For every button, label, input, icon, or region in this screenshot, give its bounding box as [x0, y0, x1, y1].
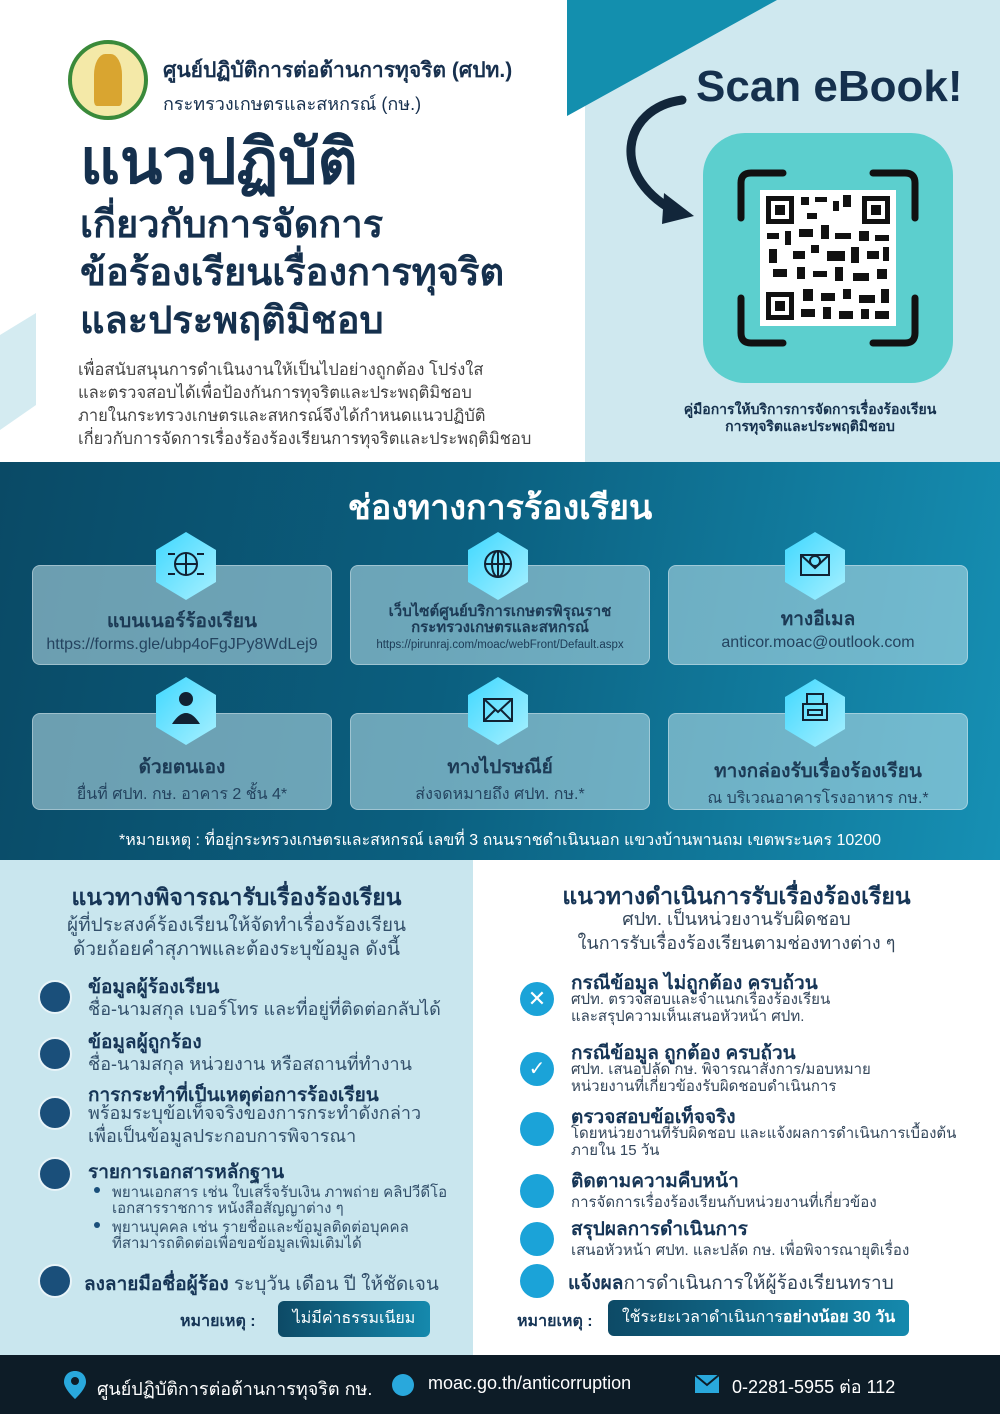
step: correct [520, 1042, 871, 1095]
main title: เกี่ยวกับการจัดการ [80, 204, 383, 246]
intro paragraph: เกี่ยวกับการจัดการเรื่องร้องร้องเรียนการทุจริตและประพฤติมิชอบ [78, 430, 531, 448]
intro paragraph [78, 358, 531, 448]
org name: ศูนย์ปฏิบัติการต่อต้านการทุจริต (ศปท.) [163, 59, 512, 82]
item: signature: ลงลายมือชื่อผู้ร้อง ระบุวัน เดือน ปี ให้ชัดเจน [84, 1274, 439, 1295]
note: 30 days: หมายเหตุ : [517, 1313, 593, 1330]
intro paragraph: ภายในกระทรวงเกษตรและสหกรณ์จึงได้กำหนดแนวปฏิบัติ [78, 407, 486, 425]
step: follow up [520, 1170, 877, 1211]
QR caption [684, 399, 936, 435]
step: incorrect: ศปท. ตรวจสอบและจำแนกเรื่องร้องเรียน [571, 991, 830, 1008]
step: correct: กรณีข้อมูล ถูกต้อง ครบถ้วน [571, 1043, 796, 1064]
heading: แนวทางดำเนินการรับเรื่องร้องเรียน [562, 883, 911, 909]
card: box: ทางกล่องรับเรื่องร้องเรียน [714, 761, 922, 782]
step: verify [520, 1105, 956, 1159]
card: email: anticor.moac@outlook.com [721, 634, 915, 651]
subtitle: ในการรับเรื่องร้องเรียนตามช่องทางต่าง ๆ [578, 933, 895, 953]
step: correct: ✓ [529, 1058, 545, 1080]
item: accused: ข้อมูลผู้ถูกร้อง [88, 1032, 202, 1053]
step: follow up: การจัดการเรื่องร้องเรียนกับหน่วยงานที่เกี่ยวข้อง [571, 1194, 877, 1211]
footer: ศูนย์ปฏิบัติการต่อต้านการทุจริต กษ. [97, 1379, 372, 1399]
footer: moac.go.th/anticorruption [428, 1373, 631, 1393]
item: evidence: รายการเอกสารหลักฐาน [88, 1162, 284, 1183]
intro paragraph: และตรวจสอบได้เพื่อป้องกันการทุจริตและประพฤติมิชอบ [78, 384, 472, 402]
step: incorrect: ✕ [528, 986, 546, 1011]
item: accused: ชื่อ-นามสกุล หน่วยงาน หรือสถานที่ทำงาน [88, 1054, 412, 1074]
item: evidence: พยานเอกสาร เช่น ใบเสร็จรับเงิน ภาพถ่าย คลิปวีดีโอ [112, 1184, 447, 1201]
item: action: พร้อมระบุข้อเท็จจริงของการกระทำดังกล่าว [88, 1103, 421, 1123]
step: incorrect: และสรุปความเห็นเสนอหัวหน้า ศปท. [571, 1008, 804, 1025]
address footnote: *หมายเหตุ : ที่อยู่กระทรวงเกษตรและสหกรณ์ เลขที่ 3 ถนนราชดำเนินนอก แขวงบ้านพานถม เขตพระนคร 10200 [119, 832, 881, 849]
card: email [668, 565, 968, 665]
card: in person: ยื่นที่ ศปท. กษ. อาคาร 2 ชั้น 4* [77, 786, 287, 803]
card: box [668, 713, 968, 810]
item: accused [38, 1032, 412, 1075]
main title: แนวปฏิบัติ [80, 128, 358, 197]
item: evidence: พยานบุคคล เช่น รายชื่อและข้อมูลติดต่อบุคคล [112, 1219, 409, 1236]
org name [163, 58, 512, 114]
subtitle: ศปท. เป็นหน่วยงานรับผิดชอบ [622, 909, 851, 929]
item: complainant: ข้อมูลผู้ร้องเรียน [88, 977, 219, 998]
channels title: ช่องทางการร้องเรียน [348, 489, 652, 527]
card: post: ทางไปรษณีย์ [447, 757, 553, 778]
step: verify: โดยหน่วยงานที่รับผิดชอบ และแจ้งผลการดำเนินการเบื้องต้น [571, 1125, 956, 1142]
item: action [38, 1081, 421, 1147]
step: incorrect: กรณีข้อมูล ไม่ถูกต้อง ครบถ้วน [571, 973, 818, 994]
intro paragraph: เพื่อสนับสนุนการดำเนินงานให้เป็นไปอย่างถูกต้อง โปร่งใส [78, 361, 483, 379]
decorative small triangle left [0, 313, 36, 430]
icon: globe [392, 1374, 414, 1396]
card: banner: https://forms.gle/ubp4oFgJPy8WdLej9 [46, 636, 318, 653]
card: in person: ด้วยตนเอง [139, 757, 225, 778]
card: post: ส่งจดหมายถึง ศปท. กษ.* [415, 786, 585, 803]
step: correct: หน่วยงานที่เกี่ยวข้องรับผิดชอบดำเนินการ [571, 1078, 836, 1095]
step: summary: เสนอหัวหน้า ศปท. และปลัด กษ. เพื่อพิจารณายุติเรื่อง [571, 1242, 909, 1259]
item: evidence: เอกสารราชการ หนังสือสัญญาต่าง ๆ [112, 1200, 344, 1217]
panel: complaint channels [0, 462, 1000, 860]
item: action: การกระทำที่เป็นเหตุต่อการร้องเรียน [88, 1085, 379, 1106]
item: complainant [38, 976, 441, 1020]
step: summary [520, 1219, 909, 1260]
step: summary: สรุปผลการดำเนินการ [571, 1219, 748, 1240]
icon: pin [64, 1371, 86, 1399]
card: banner [32, 565, 332, 665]
footer: 0-2281-5955 ต่อ 112 [732, 1377, 895, 1397]
note: free: ไม่มีค่าธรรมเนียม [293, 1310, 415, 1327]
item: complainant: ชื่อ-นามสกุล เบอร์โทร และที่อยู่ที่ติดต่อกลับได้ [88, 999, 441, 1019]
subtitle [67, 912, 406, 960]
main title: ข้อร้องเรียนเรื่องการทุจริต [80, 252, 504, 294]
step: incorrect [520, 972, 830, 1026]
QR caption: คู่มือการให้บริการการจัดการเรื่องร้องเรียน [684, 401, 936, 417]
item: action: เพื่อเป็นข้อมูลประกอบการพิจารณา [88, 1126, 356, 1146]
card: post [350, 713, 650, 810]
card: box: ณ บริเวณอาคารโรงอาหาร กษ.* [707, 790, 929, 807]
right header panel [585, 0, 1000, 462]
card: email: ทางอีเมล [781, 609, 855, 630]
card: website [350, 565, 650, 665]
logo [68, 40, 148, 120]
arrow [626, 96, 694, 224]
subtitle [578, 908, 895, 953]
decorative teal triangle [567, 0, 777, 116]
card: banner: แบนเนอร์ร้องเรียน [107, 611, 257, 632]
step: correct: ศปท. เสนอปลัด กษ. พิจารณาสั่งการ/มอบหมาย [571, 1061, 871, 1078]
subtitle: ด้วยถ้อยคำสุภาพและต้องระบุข้อมูล ดังนี้ [73, 939, 400, 960]
note: 30 days: ใช้ระยะเวลาดำเนินการอย่างน้อย 30 วัน [622, 1309, 895, 1326]
icons: hex [156, 532, 845, 747]
card: website: กระทรวงเกษตรและสหกรณ์ [411, 619, 589, 636]
main title: และประพฤติมิชอบ [80, 300, 384, 342]
step: notify [520, 1264, 894, 1298]
item: signature [38, 1264, 439, 1298]
card: website: เว็บไซต์ศูนย์บริการเกษตรพิรุณราช [389, 603, 611, 620]
heading: แนวทางพิจารณารับเรื่องร้องเรียน [72, 884, 401, 910]
card: in person [32, 713, 332, 810]
org name: กระทรวงเกษตรและสหกรณ์ (กษ.) [163, 94, 421, 114]
step: follow up: ติดตามความคืบหน้า [571, 1171, 739, 1192]
QR caption: การทุจริตและประพฤติมิชอบ [725, 418, 895, 434]
note: 30 days [517, 1300, 909, 1336]
panel: handling process [473, 860, 1000, 1355]
step: verify: ภายใน 15 วัน [571, 1142, 659, 1159]
note: free: หมายเหตุ : [180, 1313, 256, 1330]
item: evidence [38, 1157, 447, 1252]
panel: consideration guidelines [0, 860, 473, 1355]
main title [80, 128, 504, 342]
step: notify: แจ้งผลการดำเนินการให้ผู้ร้องเรียนทราบ [568, 1273, 894, 1294]
card: website: https://pirunraj.com/moac/webFront/Default.aspx [376, 639, 624, 651]
scan ebook heading: Scan eBook! [696, 62, 963, 111]
subtitle: ผู้ที่ประสงค์ร้องเรียนให้จัดทำเรื่องร้องเรียน [67, 915, 406, 936]
QR card [703, 133, 953, 383]
step: verify: ตรวจสอบข้อเท็จจริง [571, 1107, 736, 1128]
footer [0, 1355, 1000, 1414]
note: free [180, 1301, 430, 1337]
item: evidence: ที่สามารถติดต่อเพื่อขอข้อมูลเพิ่มเติมได้ [112, 1235, 362, 1252]
icon: mail [695, 1375, 719, 1393]
